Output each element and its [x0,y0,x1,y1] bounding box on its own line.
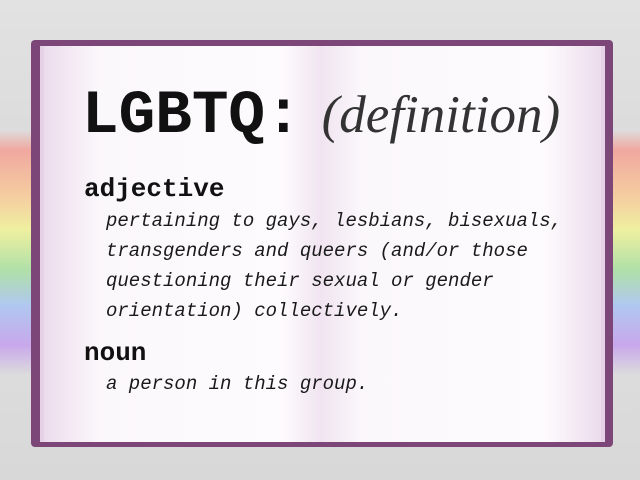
text: adjective definition: questioning their sexual or gender [106,270,494,292]
text: adjective definition [106,210,562,322]
heading: noun: noun [84,338,146,368]
book cover [31,40,613,447]
left page [40,46,325,442]
title: LGBTQ: (definition) [82,82,560,151]
right page [321,46,605,442]
text: adjective definition: orientation) collectively. [106,300,402,322]
text: noun definition: a person in this group. [106,373,368,395]
text: adjective definition: pertaining to gays, lesbians, bisexuals, [106,210,562,232]
text: adjective definition: transgenders and queers (and/or those [106,240,528,262]
heading: adjective: adjective [84,174,224,204]
